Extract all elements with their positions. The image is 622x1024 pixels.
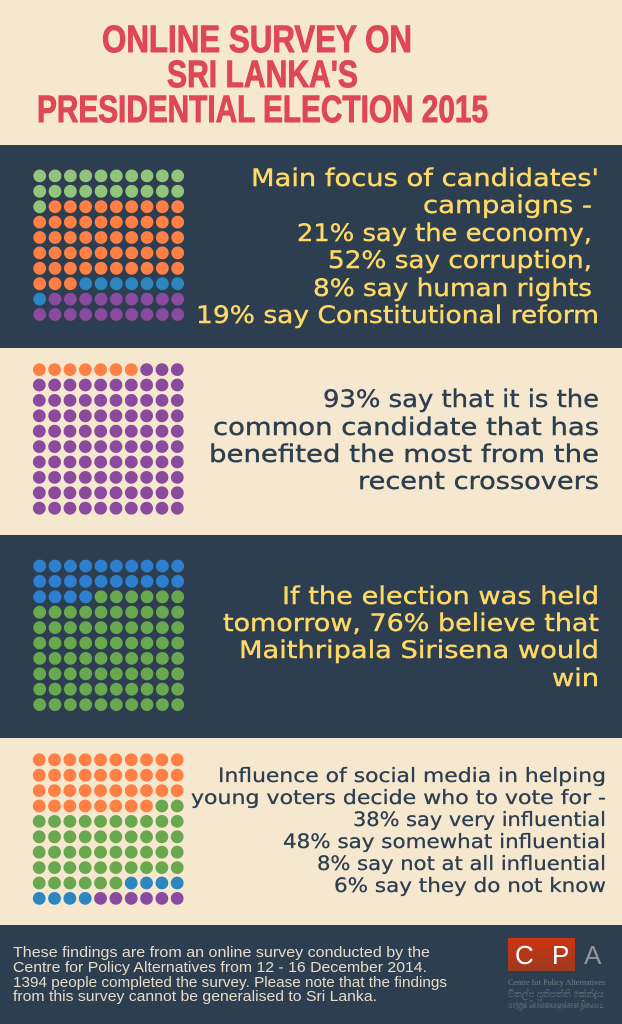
- text: election prediction: If the election was held: [282, 582, 599, 610]
- text: campaign focus: Main focus of candidates': [251, 164, 599, 192]
- footnote text: [13, 944, 447, 1005]
- footnote text: These findings are from an online survey conducted by the: [13, 944, 430, 961]
- text: election prediction: win: [552, 664, 599, 692]
- text: election prediction: Maithripala Sirisena would: [239, 636, 599, 664]
- text: campaign focus: 52% say corruption,: [328, 246, 592, 274]
- text: social media: young voters decide who to vote for -: [191, 786, 606, 809]
- text: campaign focus: campaigns -: [423, 191, 592, 219]
- text: crossovers: recent crossovers: [358, 467, 599, 495]
- text: crossovers: benefited the most from the: [209, 440, 599, 468]
- dot chart: social media: [39, 760, 177, 898]
- text: social media: 38% say very influential: [353, 808, 606, 831]
- title: [37, 19, 488, 131]
- text: campaign focus: 19% say Constitutional reform: [196, 301, 599, 329]
- panel: footer: [0, 925, 622, 1024]
- title: PRESIDENTIAL ELECTION 2015: [37, 89, 488, 131]
- logo: CPA: විකල්ප ප්‍රතිපත්ති කේන්ද්‍රය: [508, 987, 604, 1000]
- text: election prediction: [223, 582, 599, 692]
- text: social media: 8% say not at all influential: [317, 852, 606, 875]
- logo: CPA: Centre for Policy Alternatives: [508, 977, 605, 987]
- logo: CPA: P: [552, 940, 569, 970]
- panel: social media: [0, 738, 622, 925]
- panel: election prediction: [0, 535, 622, 738]
- footnote text: 1394 people completed the survey. Please note that the findings: [13, 974, 447, 991]
- title: ONLINE SURVEY ON: [102, 19, 412, 61]
- text: campaign focus: 8% say human rights: [313, 274, 592, 302]
- dot chart: crossovers: [39, 370, 177, 508]
- panel: crossovers: [0, 348, 622, 535]
- header panel: [0, 0, 622, 145]
- text: social media: 48% say somewhat influential: [283, 830, 606, 853]
- footnote text: from this survey cannot be generalised to Sri Lanka.: [13, 988, 377, 1005]
- text: social media: [191, 764, 606, 897]
- panel: campaign focus: [0, 145, 622, 348]
- title: SRI LANKA'S: [167, 54, 358, 96]
- logo: CPA: A: [584, 940, 602, 970]
- dot chart: election prediction: [40, 566, 178, 705]
- logo: CPA: C: [515, 940, 534, 970]
- logo: CPA: [508, 938, 605, 1011]
- footnote text: Centre for Policy Alternatives from 12 - 16 December 2014.: [13, 959, 427, 976]
- text: election prediction: tomorrow, 76% believe that: [223, 609, 599, 637]
- text: social media: Influence of social media in helping: [218, 764, 606, 787]
- text: crossovers: [209, 385, 599, 495]
- dot chart: campaign focus: [40, 176, 178, 314]
- text: crossovers: 93% say that it is the: [323, 385, 599, 413]
- text: crossovers: common candidate that has: [213, 413, 599, 441]
- text: campaign focus: [196, 164, 599, 329]
- text: campaign focus: 21% say the economy,: [297, 219, 592, 247]
- text: social media: 6% say they do not know: [334, 874, 606, 897]
